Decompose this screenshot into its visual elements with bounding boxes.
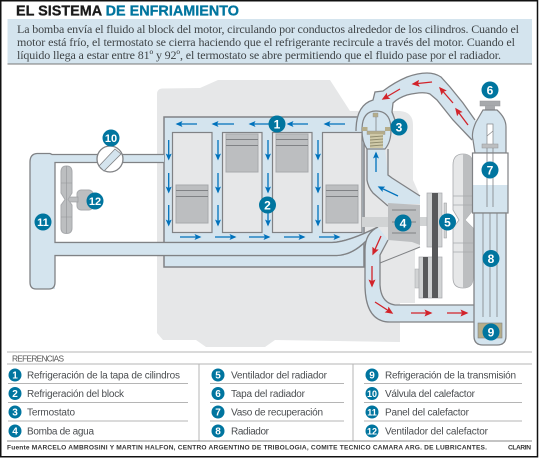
badge 4 [394, 214, 412, 232]
pulleys and belt [415, 193, 446, 298]
legend item 7 [212, 406, 323, 419]
legend item 1: Refrigeración de la tapa de cilindros [27, 370, 180, 382]
publisher credit: CLARIN [508, 444, 531, 452]
badge 9 [482, 324, 500, 340]
badge 8 [482, 250, 500, 267]
legend item 5: Ventilador del radiador [231, 370, 328, 382]
legend item 2: 2 [12, 389, 18, 400]
water pump [362, 203, 428, 245]
badge 9: 9 [488, 326, 495, 340]
badge 2: 2 [264, 198, 271, 212]
legend item 6: 6 [215, 389, 221, 400]
radiator cap and neck [472, 101, 506, 153]
intro panel [8, 19, 532, 64]
legend item 5: 5 [215, 371, 221, 382]
badge 1: 1 [274, 118, 281, 132]
badge 10: 10 [105, 133, 117, 145]
legend heading: REFERENCIAS [12, 354, 64, 364]
legend item 5 [212, 368, 328, 382]
legend item 12: Ventilador del calefactor [385, 426, 489, 438]
legend [7, 352, 532, 441]
badge 11 [34, 214, 52, 230]
legend item 6: Tapa del radiador [231, 389, 306, 400]
blue flow arrows [169, 124, 398, 237]
legend item 2: Refrigeración del block [27, 389, 125, 400]
cylinder 1 [172, 132, 212, 232]
badge 7: 7 [487, 164, 494, 178]
badge 3 [390, 118, 408, 136]
upper radiator hose [356, 73, 476, 140]
legend item 2 [8, 387, 125, 400]
legend item 7: Vaso de recuperación [231, 408, 323, 418]
badge 12 [86, 192, 104, 210]
legend item 3: Termostato [27, 408, 75, 418]
badge 2 [259, 196, 276, 214]
cylinder 4 [322, 132, 362, 232]
red flow arrows [372, 82, 468, 313]
badge 7 [482, 162, 498, 178]
badge 10 [102, 130, 120, 146]
legend item 10: Válvula del calefactor [385, 389, 476, 400]
heater valve [97, 146, 123, 172]
badge 5: 5 [444, 216, 451, 230]
thermostat valve [362, 113, 390, 148]
legend item 1: 1 [12, 371, 18, 382]
radiator core [474, 213, 506, 345]
intro panel: líquido llega a estar entre 81º y 92º, el termostato se abre permitiendo que el fluido pase por el radiador. [17, 48, 501, 62]
badge 12: 12 [89, 196, 101, 208]
cylinder 2 [222, 132, 262, 232]
diagram: cooling system [30, 73, 508, 345]
badge 11: 11 [37, 217, 49, 229]
intro panel: motor está frío, el termostato se cierra haciendo que el refrigerante recircule a través del motor. Cuando el [17, 35, 516, 49]
lower radiator hose [365, 227, 476, 322]
legend item 9: Refrigeración de la transmisión [385, 370, 516, 382]
engine silhouette [157, 80, 420, 347]
legend item 4: 4 [12, 427, 18, 438]
legend item 3 [8, 406, 75, 419]
source credit: Fuente MARCELO AMBROSINI Y MARTIN HALFON, CENTRO ARGENTINO DE TRIBOLOGIA, COMITE TECNICO CAMARA ARG. DE LUBRICANTES. [7, 444, 487, 452]
legend item 7: 7 [215, 408, 221, 419]
legend item 9: 9 [369, 371, 375, 382]
legend item 11: Panel del calefactor [385, 408, 470, 418]
transmission cooler [478, 323, 502, 338]
recovery vessel [472, 148, 508, 213]
badge 1 [268, 116, 286, 132]
cylinder 3 [272, 132, 312, 232]
badge 3: 3 [396, 120, 403, 134]
intro panel: La bomba envía el fluido al block del motor, circulando por conductos alrededor de los cilindros. Cuando el [17, 22, 520, 36]
heater circuit panel [30, 154, 388, 289]
heater fan [61, 166, 93, 234]
engine block coolant jacket [164, 117, 364, 267]
thermostat and pump inlet hose [362, 111, 420, 206]
badge 6: 6 [487, 84, 494, 98]
legend item 10 [366, 387, 476, 400]
legend item 6 [212, 387, 306, 400]
badge 5 [439, 214, 456, 230]
badge 4: 4 [400, 216, 407, 230]
legend item 11 [366, 406, 470, 418]
badge 6 [482, 82, 498, 98]
legend item 10: 10 [367, 389, 377, 399]
legend item 3: 3 [12, 408, 18, 419]
radiator fan [453, 154, 473, 288]
badge 8: 8 [488, 252, 495, 266]
title: EL SISTEMA DE ENFRIAMIENTO [16, 4, 239, 20]
legend item 12: 12 [367, 426, 377, 436]
legend item 8: 8 [215, 427, 221, 438]
legend item 8 [212, 424, 270, 438]
legend item 11: 11 [367, 408, 377, 418]
legend item 4: Bomba de agua [27, 426, 94, 438]
legend item 4 [8, 424, 94, 438]
legend item 8: Radiador [231, 426, 270, 438]
